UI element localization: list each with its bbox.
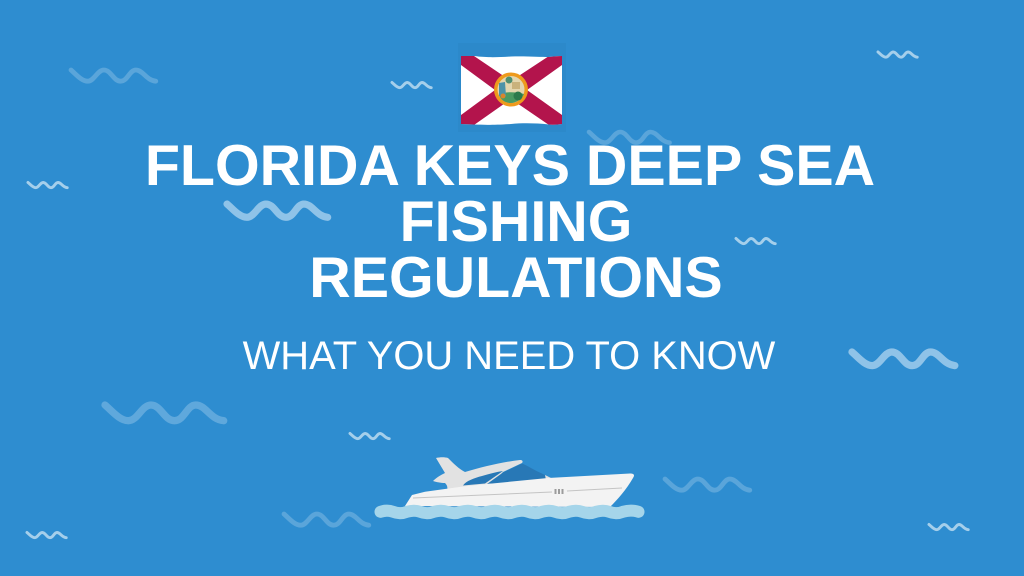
icon: state seal [494,72,528,106]
icon: Florida flag [461,56,562,125]
boat hull [405,474,634,507]
boat cabin and fin [433,457,553,491]
subtitle: WHAT YOU NEED TO KNOW [243,334,775,378]
title: REGULATIONS [309,246,723,310]
water [380,511,638,513]
title [145,134,875,310]
title: FLORIDA KEYS DEEP SEA [145,134,875,198]
title: FISHING [400,190,632,254]
illustration: white boat on water [374,457,644,520]
